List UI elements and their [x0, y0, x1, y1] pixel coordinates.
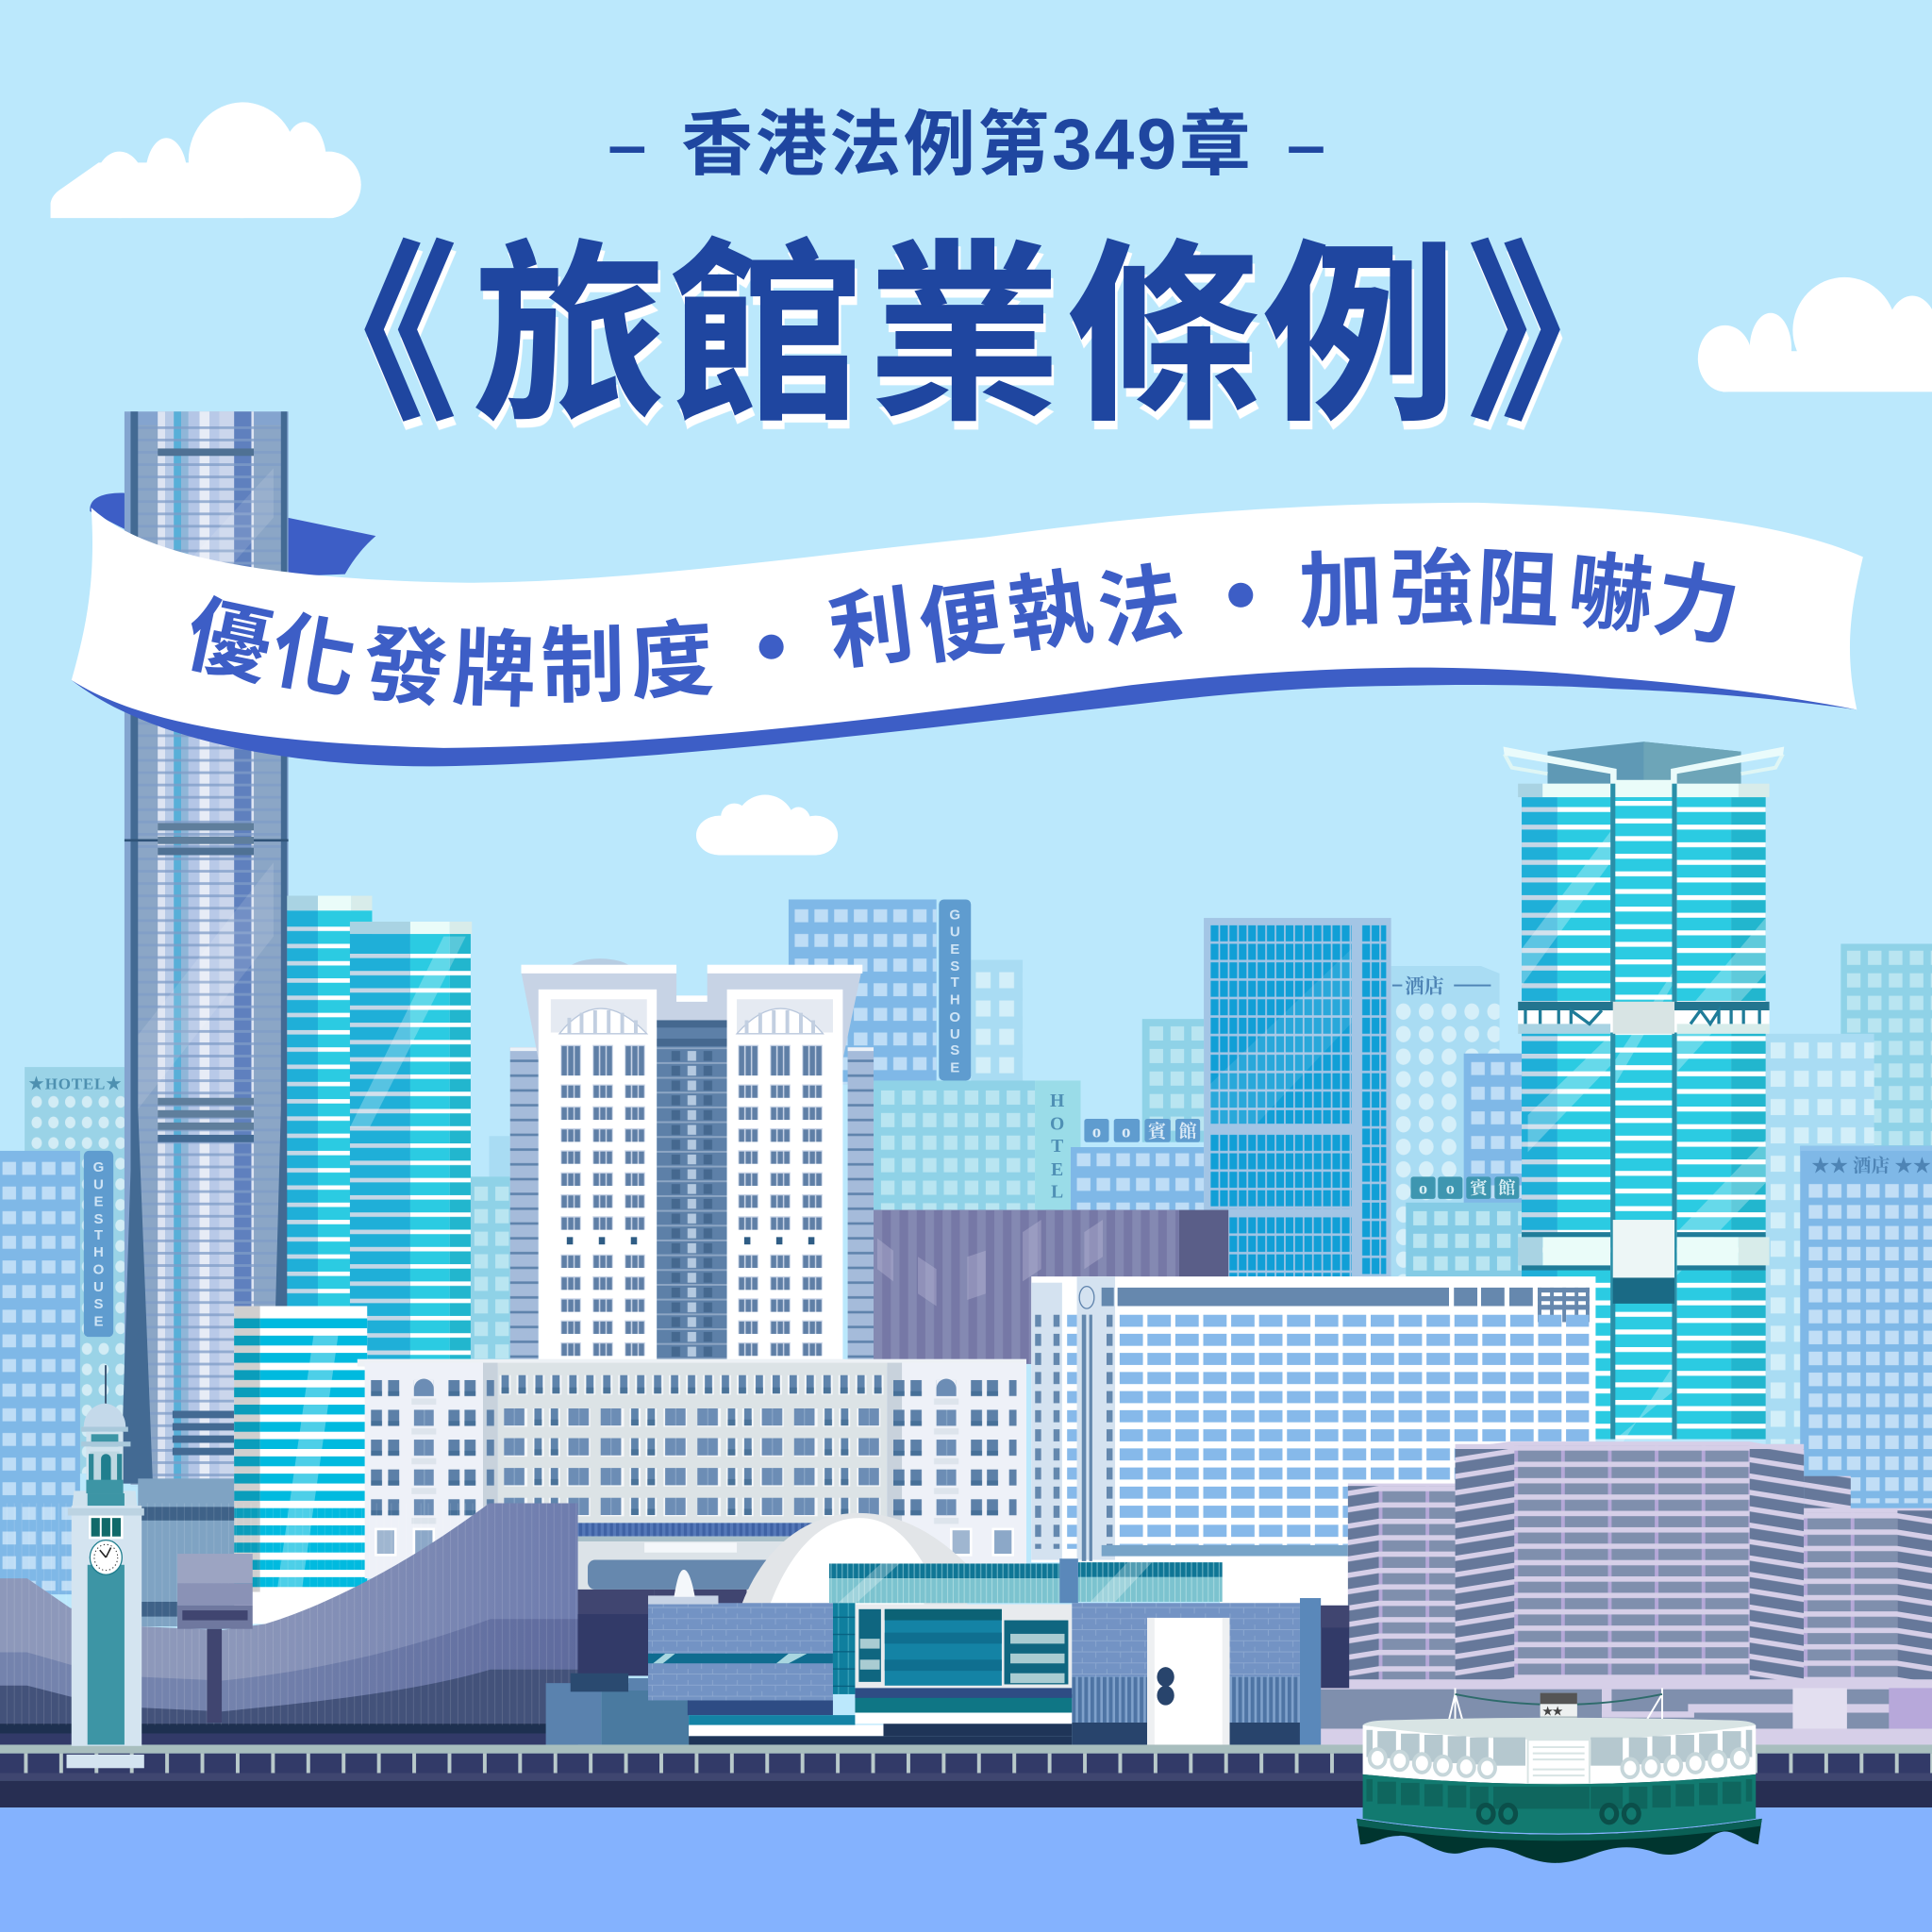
- ribbon slogan: 發: [359, 617, 451, 718]
- tower: International Commerce Centre: [121, 411, 293, 1486]
- keel: [1357, 1819, 1762, 1863]
- building: blue-glass office: [1204, 918, 1391, 1276]
- tower shaft: [68, 1480, 144, 1746]
- building: pale hotel with dots: 酒店: [1405, 975, 1444, 998]
- cyan towers: [234, 896, 472, 1624]
- left wing: [1031, 1283, 1077, 1560]
- green lower hull: [1363, 1774, 1756, 1834]
- window grid: [1120, 1315, 1589, 1545]
- roof dome: [563, 958, 637, 993]
- ribbon slogan: 執: [1002, 559, 1098, 664]
- clock tower: [67, 1365, 144, 1768]
- top bands: [1118, 1288, 1590, 1322]
- building: far right teal: [1840, 943, 1932, 1313]
- bow door: [1528, 1740, 1590, 1784]
- building: pale hotel with dots: [1391, 966, 1500, 1276]
- building: low teal beside tower: [471, 1136, 510, 1361]
- roof cap: [521, 965, 862, 1059]
- purple waterfront hotel: [1308, 1441, 1932, 1744]
- dark plinth between buildings: [578, 1590, 655, 1675]
- ribbon slogan: [178, 541, 1746, 718]
- twin-fin right skyscraper: [1503, 741, 1784, 1454]
- tower dark edges: [121, 411, 293, 1484]
- left lower block: [1348, 1484, 1456, 1684]
- building: teal with HOTEL sign: [874, 1080, 1080, 1210]
- beams: [125, 448, 289, 1456]
- ribbon slogan: 加: [1297, 542, 1384, 639]
- building: right hotel with sign: ★★ 酒店 ★★: [1811, 1156, 1931, 1176]
- building: HOTEL left: [25, 1067, 129, 1474]
- right brick block with door: [1072, 1598, 1349, 1746]
- side annexes: [510, 1047, 874, 1365]
- roof: [1503, 741, 1784, 789]
- centre glass strips: [158, 411, 254, 1484]
- ribbon face: [72, 503, 1863, 748]
- rooftop sculpture: [648, 1570, 718, 1605]
- tower body: [1518, 780, 1770, 1454]
- cloud: upper left: [51, 102, 361, 218]
- big white waterfront hotel: [1031, 1276, 1595, 1606]
- ribbon slogan: 阻: [1474, 541, 1562, 639]
- ribbon underside: [72, 653, 1857, 766]
- left wing block: [365, 1363, 498, 1578]
- right wing block: [887, 1363, 1026, 1578]
- centre block: [498, 1363, 887, 1523]
- left wing: [539, 990, 657, 1363]
- building: small blue: [1464, 1054, 1523, 1208]
- building: right pale: [1766, 1034, 1874, 1453]
- clock face: [90, 1541, 122, 1574]
- sky lobby: [1518, 1002, 1770, 1034]
- building: teal with HOTEL sign: HOTEL: [1050, 1091, 1064, 1203]
- right wing: [727, 990, 842, 1363]
- museum teal glass: [689, 1558, 1223, 1746]
- podium: [1308, 1679, 1932, 1744]
- subtitle: 香港法例第349章: [681, 105, 1251, 185]
- upper block: [1456, 1441, 1804, 1684]
- main title: 《旅館業條例》: [265, 228, 1659, 444]
- Peninsula hotel tower: [510, 958, 874, 1365]
- building: low teal with sign: oo賓館: [1419, 1178, 1516, 1198]
- top deck: [1363, 1718, 1756, 1740]
- glass reflection: [138, 468, 274, 1109]
- dome: [84, 1404, 125, 1426]
- building: right hotel with sign: [1800, 1146, 1932, 1509]
- floor lines: [130, 426, 282, 1486]
- white upper hull: [1363, 1725, 1756, 1784]
- building: low teal with sign: [1406, 1176, 1523, 1276]
- forecourt: [578, 1523, 837, 1602]
- ribbon slogan: 法: [1091, 555, 1188, 659]
- ribbon slogan: 強: [1390, 541, 1474, 635]
- sign: GUESTHOUSE left: [84, 1151, 113, 1337]
- background buildings: right: [1204, 918, 1932, 1509]
- front cyan tower: [350, 922, 472, 1360]
- ribbon slogan: 便: [913, 571, 1009, 675]
- cap band: [1518, 780, 1770, 797]
- clock windows: [89, 1516, 124, 1539]
- ribbon slogan: 嚇: [1564, 542, 1657, 644]
- blue plinth block: [546, 1674, 689, 1744]
- ribbon slogan: 度: [626, 611, 717, 710]
- ribbon slogan: 牌: [451, 622, 538, 718]
- cloud: small centre: [696, 794, 838, 855]
- building: guesthouse centre back: [789, 899, 1023, 1084]
- white door: [1147, 1618, 1230, 1746]
- Cultural Centre curved building: [0, 1503, 578, 1747]
- sign: GUESTHOUSE left: GUESTHOUSE: [93, 1159, 105, 1329]
- ribbon slogan: 優: [178, 587, 279, 696]
- masts and wire: [1448, 1688, 1662, 1725]
- Star Ferry: [1357, 1688, 1762, 1863]
- building: blue with sign: [1071, 1119, 1204, 1211]
- lantern: [81, 1426, 130, 1493]
- building: HOTEL left: ★HOTEL★: [28, 1075, 123, 1093]
- funnel: [1541, 1693, 1577, 1727]
- building: blue with sign: oo賓館: [1092, 1121, 1197, 1142]
- sign: GUESTHOUSE centre: [939, 899, 971, 1080]
- museum brick block: [648, 1570, 833, 1715]
- funnel: ★★: [1542, 1706, 1563, 1718]
- observation block on pole: [177, 1554, 253, 1723]
- mechanical floor: [1518, 1220, 1770, 1304]
- right lower block: [1804, 1476, 1932, 1686]
- life rings: [1370, 1749, 1748, 1777]
- ribbon back fold: [90, 492, 375, 579]
- ribbon slogan: 利: [824, 577, 919, 681]
- promenade railing and seawall: [0, 1744, 1932, 1807]
- water: [0, 1807, 1932, 1932]
- building: blue guesthouse left: [0, 1151, 80, 1594]
- Space Museum dome: [655, 1513, 967, 1605]
- cloud: upper right: [1698, 277, 1932, 391]
- back cyan tower: [287, 896, 372, 1321]
- ribbon slogan: 化: [265, 603, 363, 709]
- column with emblem: [1077, 1276, 1115, 1561]
- hull portholes: [1478, 1805, 1639, 1823]
- saloon windows: [1366, 1730, 1752, 1766]
- building: purple ridged: [874, 1210, 1228, 1364]
- lower windows: [1366, 1779, 1752, 1808]
- banner ribbon: [72, 503, 1863, 766]
- ribbon slogan: 力: [1647, 551, 1746, 658]
- Peninsula hotel base: [358, 1359, 1026, 1602]
- sign: GUESTHOUSE centre: GUESTHOUSE: [949, 907, 960, 1075]
- building: back small teal: [1142, 1019, 1204, 1142]
- low cyan striped block: [234, 1306, 367, 1624]
- rear block behind clock tower: [138, 1478, 234, 1626]
- ribbon slogan: 制: [541, 619, 625, 713]
- centre column: [657, 1020, 727, 1365]
